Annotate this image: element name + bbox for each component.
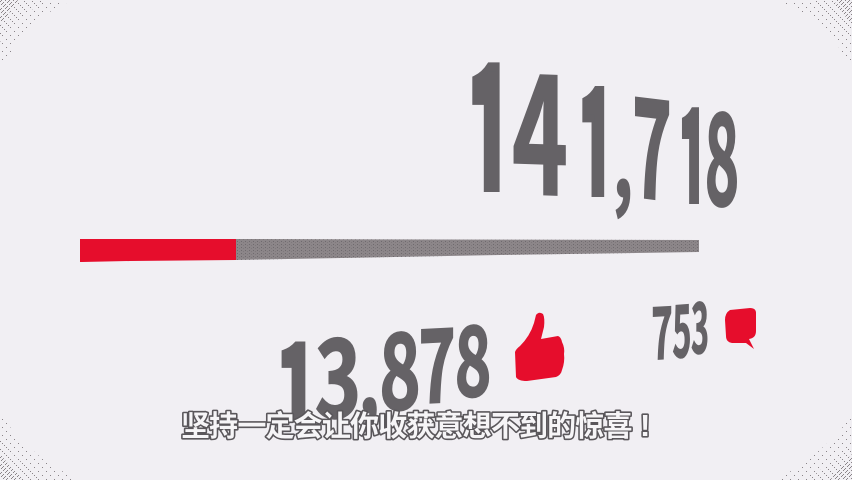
comments count: 7 [651,278,673,381]
corner dither: top right [778,0,852,62]
corner dither: bottom right [776,416,852,480]
corner dither: top left [0,0,72,62]
likes count: , [358,314,380,438]
subtitle caption: 坚持一定会让你收获意想不到的惊喜 [181,411,633,443]
corner dither: bottom left [0,416,78,480]
comments count: 3 [691,275,709,374]
progress bar track [234,239,699,260]
likes count [282,324,490,424]
likes count: 8 [379,290,421,440]
large view count: 1 [677,44,709,280]
likes count: 3 [315,294,361,449]
progress bar [80,239,699,262]
icon: speech bubble [725,308,756,349]
large view count: 8 [705,61,739,241]
subtitle caption: ! [640,408,650,443]
likes count: 7 [419,288,455,432]
large view count: , [613,80,633,226]
likes count: 1 [275,287,319,480]
large view count [472,62,737,220]
large view count: 1 [576,11,617,284]
icon: thumbs up [515,313,564,381]
comments count: 5 [673,275,691,378]
progress bar fill [80,239,236,262]
large view count: 4 [512,8,568,241]
large view count: 7 [633,44,671,240]
comments count [651,275,709,381]
likes count: 8 [455,286,491,424]
